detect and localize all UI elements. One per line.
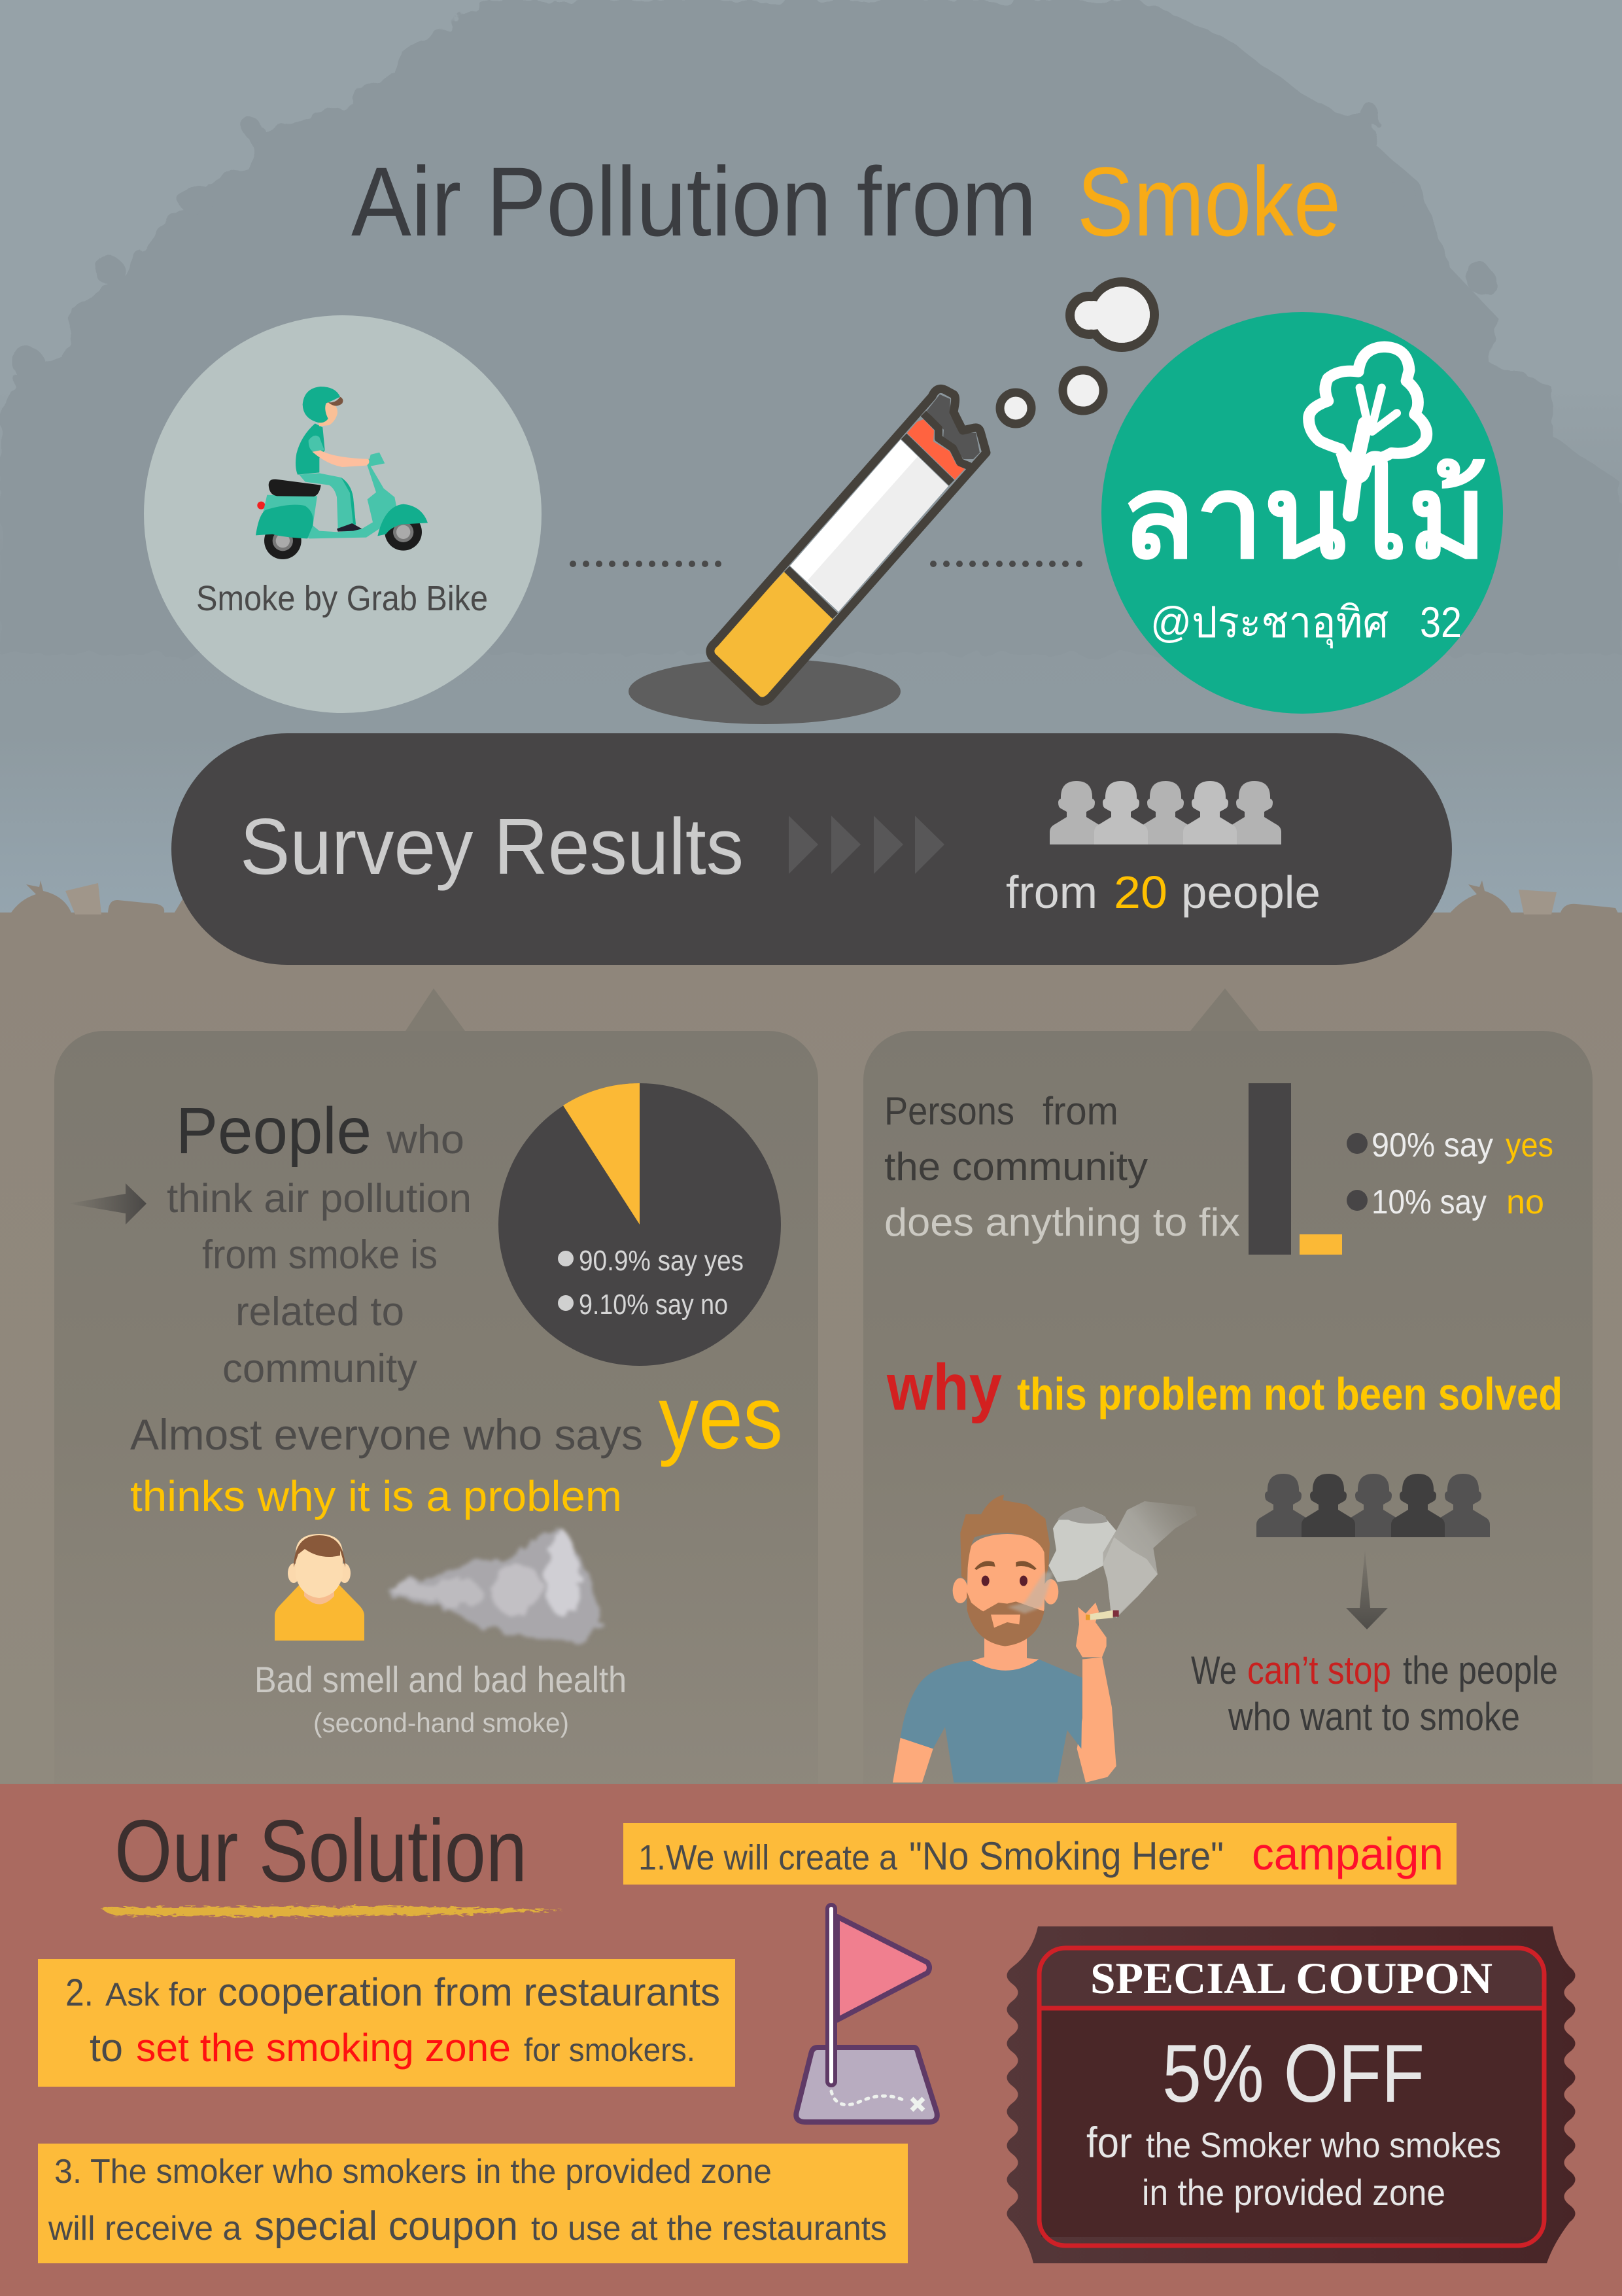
icon: smoke cloud — [388, 1526, 604, 1647]
solution 1: 1.We will create a — [638, 1838, 898, 1877]
coupon terms: in the provided zone — [1142, 2172, 1445, 2213]
heading: our solution: Our Solution — [114, 1801, 527, 1900]
text: bad smell and bad health: (second-hand smoke) — [313, 1707, 569, 1738]
legend: 90 / 10: 10% say — [1372, 1183, 1487, 1221]
coupon offer: 5% OFF — [1162, 2028, 1424, 2119]
text: bad smell and bad health — [254, 1659, 627, 1738]
text: question heading — [167, 1094, 472, 1391]
text: persons from the community: does anything to fix — [884, 1200, 1240, 1244]
text: cannot stop — [1191, 1648, 1558, 1739]
text: question heading: who — [386, 1117, 464, 1162]
solution 3: to use at the restaurants — [531, 2210, 887, 2248]
garbage silhouettes left — [10, 880, 209, 914]
text: cannot stop: can’t stop — [1247, 1648, 1391, 1692]
text: bad smell and bad health: Bad smell and bad health — [254, 1659, 627, 1700]
solution 3: will receive a — [48, 2210, 241, 2248]
heading: survey results: Survey Results — [240, 802, 744, 891]
text: question heading: People — [176, 1094, 371, 1168]
garbage silhouettes right — [1449, 880, 1619, 914]
icon: scooter rider — [256, 387, 428, 559]
panel: left question — [54, 988, 818, 1835]
banner: survey results — [171, 733, 1452, 965]
text: almost everyone says yes: thinks why it is a problem — [130, 1472, 622, 1520]
logo address: @ประชาอุทิศ — [1150, 598, 1389, 649]
solution 2: to — [90, 2026, 123, 2070]
text: from 20 people — [1006, 867, 1320, 918]
chart: pie 90.9 / 9.10: 9.10% say no — [579, 1289, 728, 1321]
sky background — [0, 0, 1622, 916]
ground — [0, 913, 1622, 1786]
text: question heading: community — [222, 1346, 417, 1391]
dotted connector left — [570, 561, 721, 567]
coupon terms: for — [1086, 2118, 1132, 2166]
icon: five people — [1050, 781, 1281, 844]
text: persons from the community — [884, 1089, 1240, 1244]
text: question heading: from smoke is — [202, 1232, 438, 1278]
text: almost everyone says yes — [130, 1368, 783, 1520]
solution 2: for smokers. — [524, 2032, 695, 2068]
coupon heading: SPECIAL COUPON — [1090, 1953, 1493, 2003]
arrow: down — [1346, 1550, 1388, 1629]
icon: cigarette butt with smoke bubbles — [629, 282, 1154, 724]
dotted connector right — [930, 561, 1082, 567]
legend: 90 / 10: yes — [1506, 1126, 1553, 1164]
coupon terms — [1086, 2118, 1501, 2213]
text: from 20 people: from — [1006, 867, 1097, 918]
coupon — [1007, 1926, 1575, 2263]
icon: flag on map — [796, 1905, 937, 2122]
label: Smoke by Grab Bike: Smoke by Grab Bike — [196, 579, 488, 618]
solution 2: cooperation from restaurants — [218, 1970, 720, 2014]
solution 2 — [38, 1959, 735, 2087]
legend: 90 / 10: 90% say — [1372, 1126, 1493, 1164]
heading: why problem not solved — [886, 1351, 1562, 1424]
solution 1 — [623, 1823, 1457, 1885]
solution 3 — [38, 2144, 908, 2263]
text: almost everyone says yes: yes — [659, 1368, 783, 1468]
underline brush — [99, 1906, 564, 1917]
heading: why problem not solved: why — [886, 1351, 1002, 1424]
text: from 20 people: people — [1181, 867, 1320, 918]
solution 2: 2. — [65, 1972, 94, 2014]
text: cannot stop: the people — [1403, 1648, 1558, 1692]
text: cannot stop: We — [1191, 1648, 1237, 1692]
chart: pie 90.9 / 9.10 — [498, 1083, 781, 1366]
solution 1: "No Smoking Here" — [909, 1834, 1224, 1878]
panel: right question — [863, 988, 1593, 1835]
solution 2: Ask for — [105, 1976, 207, 2013]
solution 3: special coupon — [254, 2204, 518, 2249]
icon: bearded man smoking — [893, 1495, 1197, 1783]
title: Smoke — [1077, 147, 1341, 256]
title: Air Pollution from — [351, 147, 1037, 256]
arrows: chevrons — [789, 816, 944, 874]
text: question heading: think air pollution — [167, 1176, 472, 1221]
legend: 90 / 10: no — [1506, 1183, 1544, 1221]
legend: 90 / 10 — [1347, 1126, 1553, 1221]
chart: pie 90.9 / 9.10: 90.9% say yes — [579, 1245, 744, 1277]
text: question heading: related to — [235, 1289, 404, 1334]
text: cannot stop: who want to smoke — [1228, 1695, 1520, 1739]
arrow: pointing to question — [68, 1183, 147, 1225]
solution 1: campaign — [1252, 1828, 1443, 1879]
logo address: 32 — [1420, 598, 1462, 646]
text: persons from the community: from — [1043, 1089, 1118, 1133]
solution 2: set the smoking zone — [136, 2026, 511, 2070]
text: persons from the community: the community — [884, 1145, 1148, 1189]
icon: tree outline — [1309, 347, 1426, 514]
icon: five dark people — [1256, 1474, 1490, 1537]
chart: bars 90 / 10 — [1249, 1083, 1342, 1255]
solution 3: 3. The smoker who smokers in the provided zone — [54, 2153, 772, 2191]
text: persons from the community: Persons — [884, 1089, 1014, 1133]
circle: Grab Bike smoke source — [144, 315, 542, 713]
band: our solution — [0, 1784, 1622, 2296]
logo wordmark: ลานไม้ — [1121, 451, 1487, 582]
text: almost everyone says yes: Almost everyone who says — [130, 1410, 643, 1459]
coupon terms: the Smoker who smokes — [1146, 2126, 1501, 2165]
text: from 20 people: 20 — [1114, 867, 1167, 918]
logo circle: Lan Mai — [1101, 312, 1503, 714]
icon: person — [275, 1534, 364, 1641]
smoke cloud silhouette — [0, 0, 1622, 654]
